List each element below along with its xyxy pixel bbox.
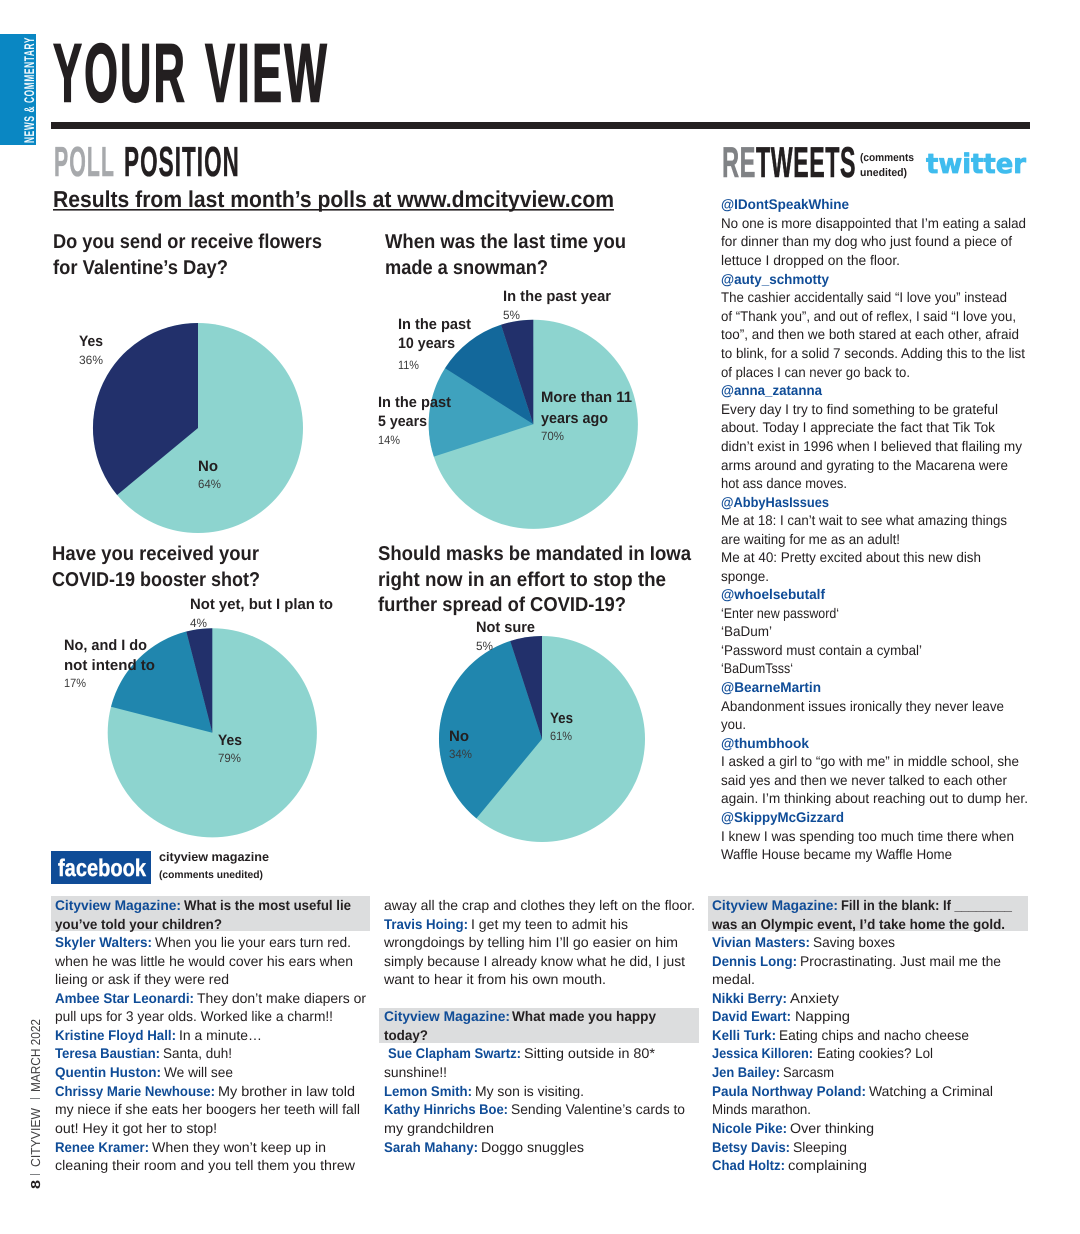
panel: facebook column 1: What is the most useful lie	[184, 897, 351, 913]
panel: facebook column 1: Renee Kramer:	[55, 1139, 149, 1155]
panel: facebook column 3: Anxiety	[790, 990, 839, 1006]
panel: facebook column 1: Ambee Star Leonardi:	[55, 990, 194, 1006]
panel: retweets list: ‘Enter new password‘	[721, 605, 839, 621]
panel: retweets list: to blink, for a solid 7 seconds. Adding this to the list	[721, 345, 1025, 361]
panel: facebook column 2: away all the crap and clothes they left on the floor.	[384, 897, 695, 913]
label: past 5 years 14%: 5 years	[378, 413, 427, 430]
panel: facebook column 2: Sue Clapham Swartz:	[388, 1045, 521, 1061]
panel: retweets list: Me at 40: Pretty excited about this new dish	[721, 549, 981, 565]
panel: retweets list: Me at 18: I can’t wait to see what amazing things	[721, 512, 1007, 528]
panel: retweets list: about. Today I appreciate the fact that Tik Tok	[721, 419, 996, 435]
panel: booster poll	[52, 543, 333, 837]
panel: facebook column 3: Paula Northway Poland:	[712, 1083, 866, 1099]
panel: facebook column 2: sunshine!!	[384, 1064, 447, 1080]
panel: flowers poll	[53, 231, 322, 533]
question: snowman: When was the last time you	[385, 231, 626, 253]
panel: facebook column 1: Skyler Walters:	[55, 934, 152, 950]
panel: retweets list: didn’t exist in 1996 when I believed that flailing my	[721, 438, 1022, 454]
panel: retweets list: @AbbyHasIssues	[721, 494, 829, 510]
label: no intent 17%: 17%	[64, 676, 86, 690]
panel: retweets list: @SkippyMcGizzard	[721, 809, 844, 825]
footer: page number and issue: MARCH 2022	[28, 1019, 43, 1092]
panel: retweets list: said yes and then we never talked to each other	[721, 772, 1007, 788]
panel: retweets list: too”, and then we both stared at each other, afraid	[721, 326, 1019, 342]
heading: poll position: POLL	[54, 138, 115, 185]
panel: facebook column 2: simply because I already know what he did, I just	[384, 953, 685, 969]
panel: facebook column 3: Procrastinating. Just mail me the	[800, 953, 1001, 969]
panel: retweets list: I asked a girl to “go with me” in middle school, she	[721, 753, 1019, 769]
panel: facebook column 1: Quentin Huston:	[55, 1064, 161, 1080]
panel: retweets list	[721, 196, 1028, 862]
panel: retweets list: @thumbhook	[721, 735, 809, 751]
panel: facebook column 3: medal.	[712, 971, 755, 987]
label: past 5 years 14%	[378, 394, 451, 447]
panel: retweets list: I knew I was spending too much time there when	[721, 828, 1014, 844]
panel: facebook column 2: Sitting outside in 80*	[524, 1045, 656, 1061]
panel: facebook column 1: Chrissy Marie Newhouse:	[55, 1083, 215, 1099]
panel: facebook column 2: Kathy Hinrichs Boe:	[384, 1101, 508, 1117]
panel: retweets list: ‘Password must contain a cymbal’	[721, 642, 922, 658]
panel: retweets list: you.	[721, 716, 746, 732]
panel: retweets list: @whoelsebutalf	[721, 586, 825, 602]
label: yes 61%: 61%	[550, 729, 572, 743]
panel: facebook column 3: Dennis Long:	[712, 953, 797, 969]
panel: facebook column 3: Cityview Magazine:	[712, 897, 838, 913]
label: yes 79%: Yes	[218, 732, 242, 749]
panel: facebook column 1	[51, 896, 370, 1173]
footer: page number and issue: CITYVIEW	[28, 1107, 43, 1167]
section tab: news and commentary	[0, 34, 37, 145]
question: flowers: Do you send or receive flowers	[53, 231, 322, 253]
panel: facebook column 1: When they won’t keep up in	[152, 1139, 326, 1155]
panel: retweets list: of “Thank you”, and out of reflex, I said “I love you,	[721, 308, 1016, 324]
panel: facebook column 3: Napping	[795, 1008, 850, 1024]
question: booster	[52, 543, 260, 591]
icon: twitter logo: twitter	[926, 149, 1027, 180]
panel: facebook column 1: my niece if she eats her boogers her teeth will fall	[55, 1101, 360, 1117]
panel: facebook column 2: I get my teen to admit his	[471, 916, 628, 932]
panel: facebook column 2: my grandchildren	[384, 1120, 494, 1136]
label: no 34%: No	[449, 728, 469, 745]
question: masks	[378, 543, 692, 616]
question: masks: Should masks be mandated in Iowa	[378, 543, 692, 565]
panel: retweets list: are waiting for me as an adult!	[721, 531, 900, 547]
title: YOUR	[53, 26, 187, 120]
label: not yet 4%: 4%	[190, 616, 207, 630]
label: past year 5%: In the past year	[503, 288, 611, 305]
label: yes 36%: 36%	[79, 353, 103, 367]
panel: retweets list: Every day I try to find something to be grateful	[721, 401, 998, 417]
heading: poll position: POSITION	[124, 138, 240, 185]
panel: facebook column 2: today?	[384, 1027, 428, 1043]
panel: facebook column 3: Over thinking	[790, 1120, 874, 1136]
heading: poll position	[54, 138, 240, 185]
label: yes 61%	[550, 710, 573, 743]
label: past 10 years 11%: In the past	[398, 316, 471, 333]
icon: facebook logo	[51, 851, 151, 884]
panel: retweets list: Waffle House became my Waffle Home	[721, 846, 952, 862]
panel: facebook column 3: was an Olympic event, I’d take home the gold.	[711, 916, 1005, 932]
panel: retweets list: No one is more disappointed that I’m eating a salad	[721, 215, 1026, 231]
label: no 34%	[449, 728, 472, 761]
panel: retweets list: @auty_schmotty	[721, 271, 829, 287]
panel: facebook column 1: pull ups for 3 year olds. Worked like a charm!!	[55, 1008, 333, 1024]
panel: snowman poll	[378, 231, 638, 529]
label: more than 11 years 70%: 70%	[541, 429, 564, 443]
question: masks: right now in an effort to stop the	[378, 569, 666, 591]
panel: facebook column 2: Cityview Magazine:	[384, 1008, 510, 1024]
panel: retweets list: hot ass dance moves.	[721, 475, 847, 491]
label: not yet 4%: Not yet, but I plan to	[190, 596, 333, 613]
panel: facebook column 3: complaining	[788, 1157, 867, 1173]
panel: facebook column 1: you’ve told your children?	[55, 916, 222, 932]
panel: facebook column 3: Nicole Pike:	[712, 1120, 787, 1136]
panel: facebook column 3: Betsy Davis:	[712, 1139, 790, 1155]
question: masks: further spread of COVID-19?	[378, 594, 626, 616]
panel: retweets list: again. I’m thinking about reaching out to dump her.	[721, 790, 1028, 806]
label: past 10 years 11%: 10 years	[398, 335, 455, 352]
label: no 64%: No	[198, 458, 218, 475]
footer: page number and issue	[28, 1019, 43, 1189]
panel: facebook column 1: We will see	[164, 1064, 233, 1080]
heading: retweets	[722, 139, 856, 187]
panel: facebook column 3: Sleeping	[793, 1139, 847, 1155]
panel: facebook column 2: Doggo snuggles	[481, 1139, 584, 1155]
panel: facebook column 2: Travis Hoing:	[384, 916, 468, 932]
pie chart: booster	[108, 628, 317, 837]
panel: retweets list: @anna_zatanna	[721, 382, 822, 398]
icon: facebook logo: facebook	[58, 855, 147, 882]
facebook source note: cityview magazine	[159, 850, 269, 864]
label: yes 36%: Yes	[79, 333, 103, 350]
panel: facebook column 3: Fill in the blank: If ________	[841, 897, 1012, 913]
panel: facebook column 3: Minds marathon.	[712, 1101, 811, 1117]
panel: retweets list: ‘BaDumTsss‘	[721, 660, 793, 676]
panel: retweets list: lettuce I dropped on the floor.	[721, 252, 900, 268]
note: comments unedited: (comments	[860, 152, 914, 164]
panel: retweets list: for dinner than my dog who just found a piece of	[721, 233, 1012, 249]
panel: facebook column 3: Watching a Criminal	[869, 1083, 993, 1099]
panel: retweets list: of places I can never go back to.	[721, 364, 910, 380]
panel: facebook column 3: Nikki Berry:	[712, 990, 787, 1006]
label: no 64%	[198, 458, 221, 491]
panel: facebook column 2: wrongdoings by telling him I’ll go easier on him	[383, 934, 678, 950]
panel: facebook column 1: when he was little he would cover his ears when	[54, 953, 353, 969]
panel: facebook column 3: Kelli Turk:	[712, 1027, 776, 1043]
label: more than 11 years 70%	[541, 389, 632, 443]
label: no 64%: 64%	[198, 477, 221, 491]
pie chart: masks	[439, 636, 645, 842]
panel: facebook column 3: David Ewart:	[712, 1008, 791, 1024]
panel: facebook column 3: Jessica Killoren:	[712, 1045, 813, 1061]
panel: facebook column 1: My brother in law told	[218, 1083, 355, 1099]
panel: facebook column 1: Cityview Magazine:	[55, 897, 181, 913]
question: snowman: made a snowman?	[385, 257, 548, 279]
panel: facebook column 2: want to hear it from his own mouth.	[383, 971, 606, 987]
label: past 10 years 11%	[398, 316, 471, 372]
label: yes 36%	[79, 333, 103, 367]
note: comments unedited	[860, 152, 914, 179]
panel: facebook column 3: Saving boxes	[813, 934, 895, 950]
panel: facebook column 1: cleaning their room and you tell them you threw	[55, 1157, 356, 1173]
panel: facebook column 2: My son is visiting.	[475, 1083, 584, 1099]
label: past 5 years 14%: 14%	[378, 433, 400, 447]
question: booster: Have you received your	[52, 543, 259, 565]
note: comments unedited: unedited)	[860, 167, 907, 179]
panel: facebook column 1: Kristine Floyd Hall:	[55, 1027, 176, 1043]
label: past 5 years 14%: In the past	[378, 394, 451, 411]
panel: retweets list: The cashier accidentally said “I love you” instead	[721, 289, 1007, 305]
label: no 34%: 34%	[449, 747, 472, 761]
panel: retweets list: sponge.	[721, 568, 769, 584]
panel: facebook column 2: Sarah Mahany:	[384, 1139, 478, 1155]
question: snowman	[385, 231, 626, 279]
panel: facebook column 1: They don’t make diapers or	[197, 990, 366, 1006]
panel: facebook column 3: Vivian Masters:	[712, 934, 810, 950]
panel: facebook column 2: What made you happy	[512, 1008, 656, 1024]
heading: retweets: TWEETS	[756, 139, 856, 187]
question: flowers: for Valentine’s Day?	[53, 257, 228, 279]
panel: facebook column 3: Jen Bailey:	[712, 1064, 780, 1080]
panel: retweets list: @BearneMartin	[721, 679, 821, 695]
facebook source note	[159, 850, 269, 881]
panel: facebook column 3: Eating chips and nacho cheese	[779, 1027, 969, 1043]
panel: facebook column 1: In a minute…	[179, 1027, 262, 1043]
label: not sure 5%: 5%	[476, 639, 493, 653]
label: not yet 4%	[190, 596, 333, 630]
panel: facebook column 1: Santa, duh!	[163, 1045, 232, 1061]
label: yes 61%: Yes	[550, 710, 573, 727]
panel: facebook column 1: lieing or ask if they were red	[55, 971, 229, 987]
panel: facebook column 1: When you lie your ears turn red.	[155, 934, 351, 950]
panel: retweets list: arms around and gyrating to the Macarena were	[721, 457, 1008, 473]
panel: facebook column 1: out! Hey it got her to stop!	[55, 1120, 217, 1136]
panel: masks poll	[378, 543, 692, 842]
label: past 10 years 11%: 11%	[398, 358, 419, 372]
label: past year 5%	[503, 288, 611, 322]
subheading: poll results source: Results from last month’s polls at www.dmcityview.com	[53, 186, 614, 212]
label: no intent 17%	[64, 637, 155, 690]
footer: page number and issue: 8	[28, 1180, 43, 1189]
question: flowers	[53, 231, 322, 279]
label: no intent 17%: not intend to	[64, 657, 155, 674]
label: past year 5%: 5%	[503, 308, 520, 322]
label: yes 79%: 79%	[218, 751, 241, 765]
panel: facebook column 2: Sending Valentine’s cards to	[511, 1101, 685, 1117]
label: more than 11 years 70%: years ago	[541, 410, 608, 427]
label: not sure 5%: Not sure	[476, 619, 535, 636]
panel: facebook column 3: Chad Holtz:	[712, 1157, 785, 1173]
panel: retweets list: ‘BaDum’	[721, 623, 772, 639]
label: yes 79%	[218, 732, 242, 765]
label: not sure 5%	[476, 619, 535, 653]
pie chart: flowers	[93, 323, 303, 533]
panel: facebook column 2: Lemon Smith:	[384, 1083, 472, 1099]
question: booster: COVID-19 booster shot?	[52, 569, 260, 591]
title: VIEW	[205, 26, 329, 120]
heading: retweets: RE	[722, 139, 756, 187]
label: no intent 17%: No, and I do	[64, 637, 147, 654]
panel: retweets list: Abandonment issues ironically they never leave	[721, 698, 1004, 714]
facebook source note: (comments unedited)	[159, 869, 263, 881]
panel: retweets list: @IDontSpeakWhine	[721, 196, 849, 212]
label: more than 11 years 70%: More than 11	[541, 389, 632, 406]
panel: facebook column 3	[708, 896, 1028, 1173]
panel: facebook column 1: Teresa Baustian:	[55, 1045, 160, 1061]
panel: facebook column 3: Sarcasm	[783, 1064, 834, 1080]
panel: facebook column 3: Eating cookies? Lol	[817, 1045, 933, 1061]
panel: facebook column 2	[379, 897, 699, 1155]
pie chart: snowman	[429, 320, 638, 529]
